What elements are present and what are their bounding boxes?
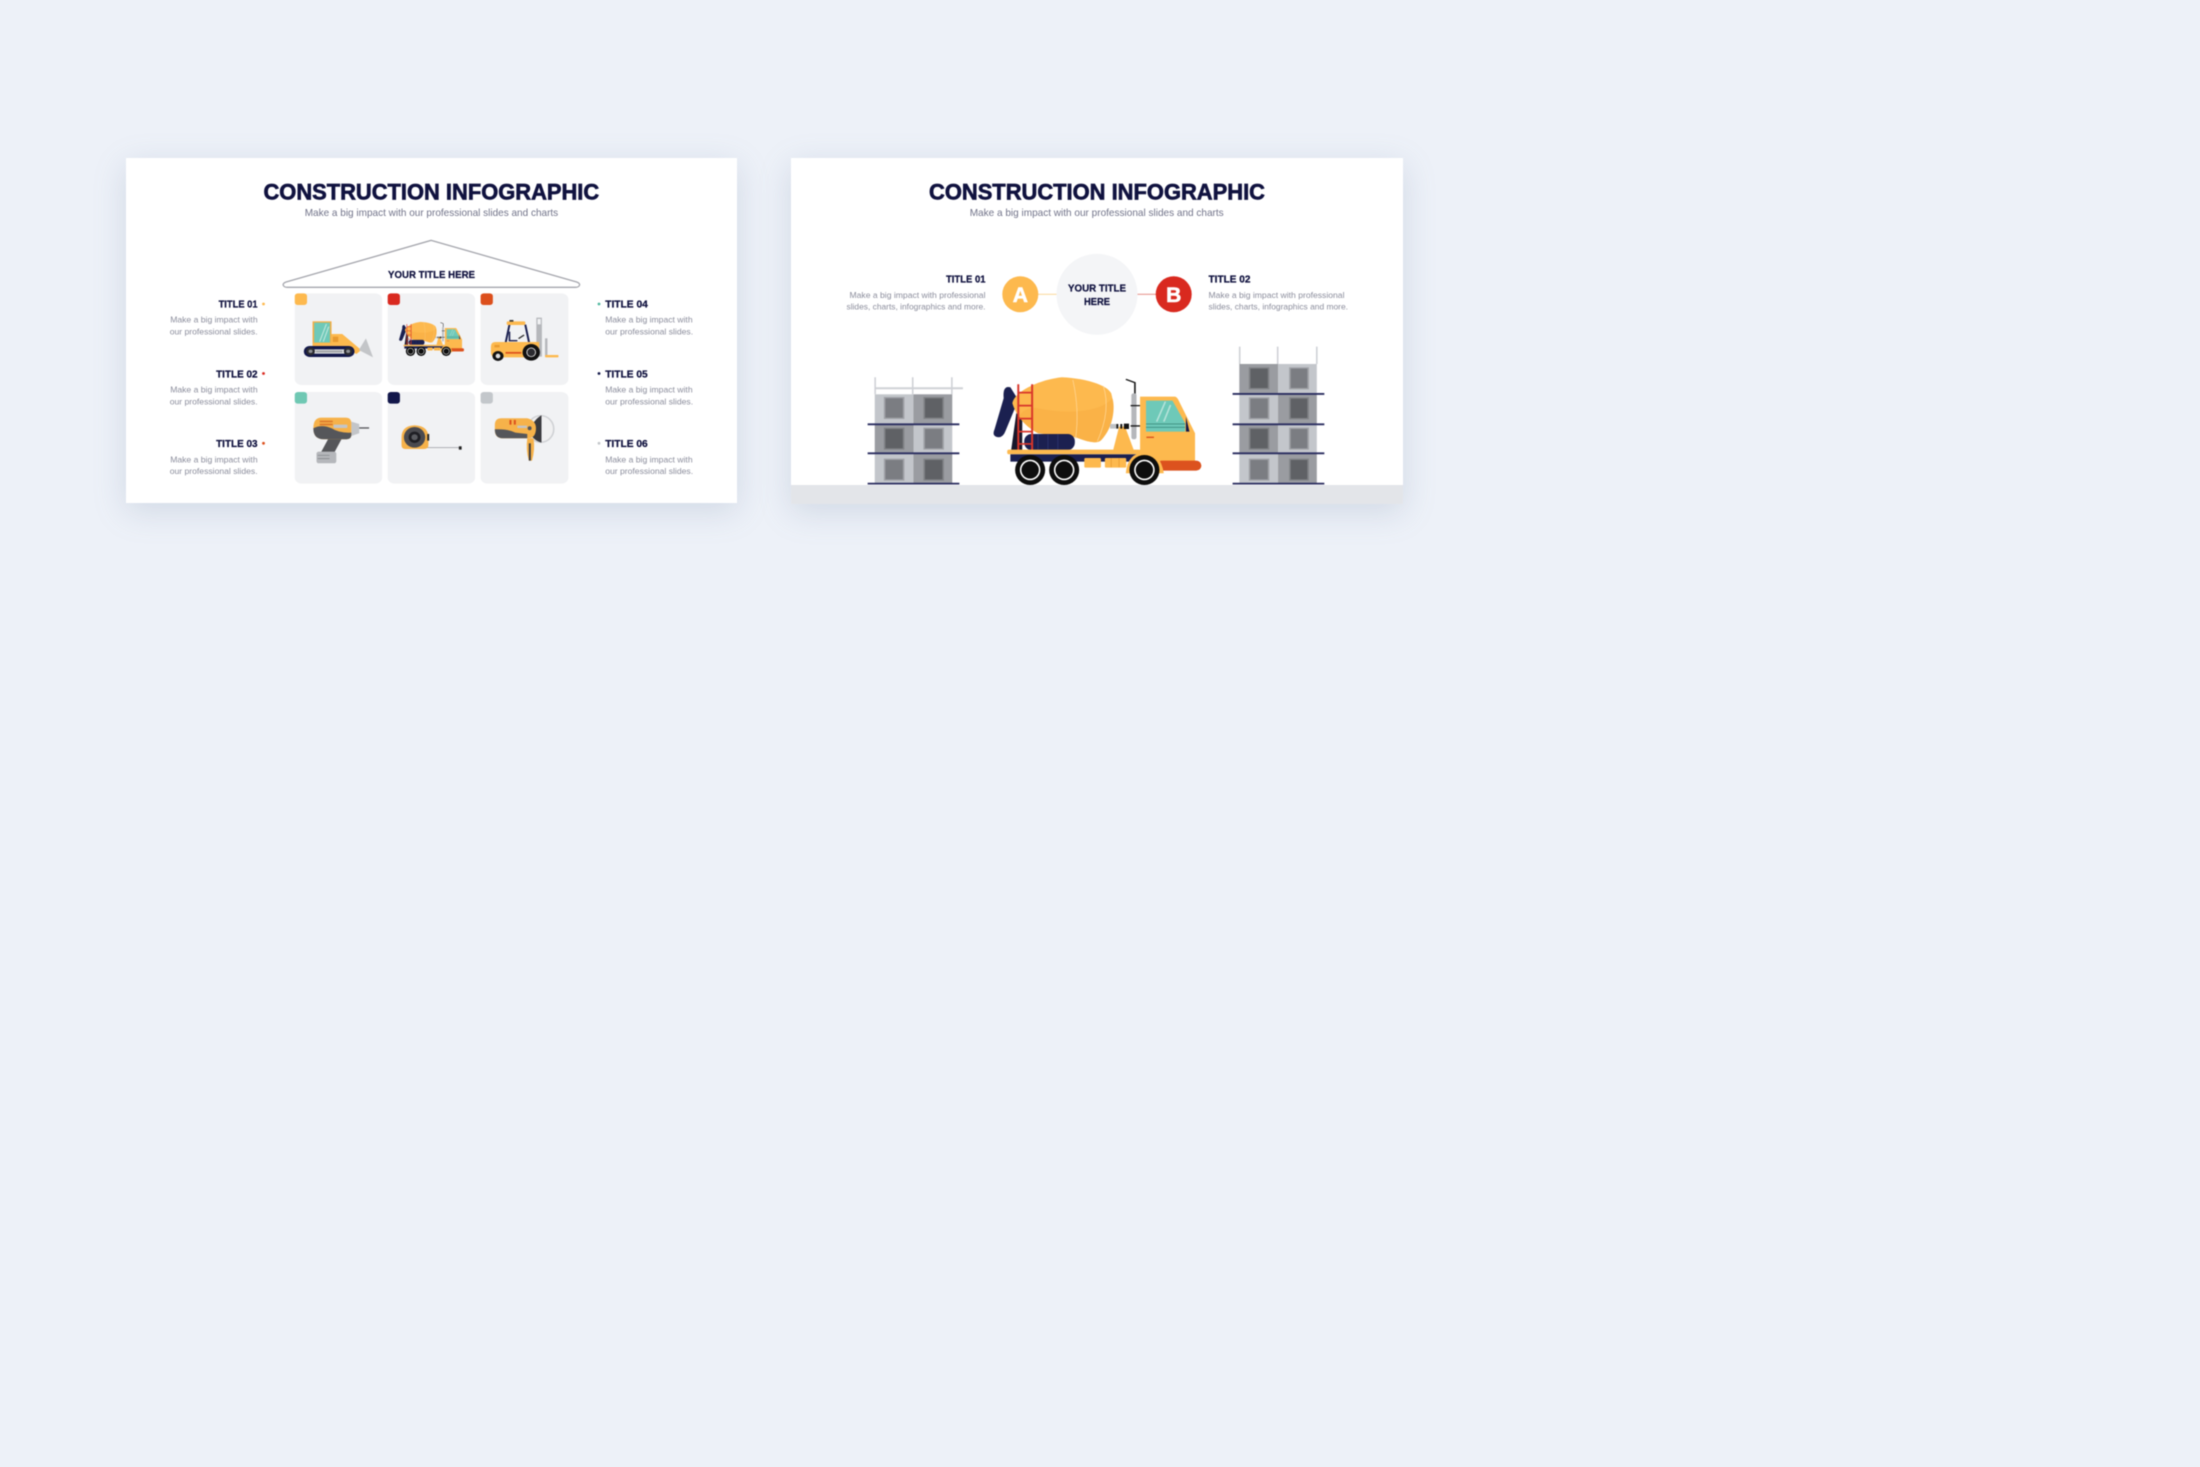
text block: title 02 <box>1208 274 1348 311</box>
badge B <box>1156 276 1192 312</box>
subtitle: Make a big impact with our professional slides and charts <box>970 207 1224 219</box>
panel: A and B comparison with mixer truck <box>791 158 1403 504</box>
left item: title 03: TITLE 03 <box>216 438 258 450</box>
subtitle: Make a big impact with our professional slides and charts <box>305 207 558 219</box>
panel: six construction tools and vehicles <box>126 158 737 503</box>
text block: title 02: slides, charts, infographics and more. <box>1208 301 1348 311</box>
title: CONSTRUCTION INFOGRAPHIC <box>929 179 1265 204</box>
central circle: YOUR TITLE <box>1068 283 1126 295</box>
icon: small mixer truck <box>399 322 464 356</box>
text block: title 01: Make a big impact with professional <box>850 290 986 300</box>
left building <box>868 377 963 484</box>
connector lines <box>1038 294 1156 295</box>
badge A <box>1002 276 1038 312</box>
card 6: angle grinder <box>481 392 568 484</box>
card 5: tape measure <box>388 392 475 484</box>
left item: title 01: our professional slides. <box>170 326 258 336</box>
right item: title 04: TITLE 04 <box>605 299 648 311</box>
left item: title 02: Make a big impact with <box>170 385 258 395</box>
right item: title 04: our professional slides. <box>605 326 693 336</box>
right item: title 05: Make a big impact with <box>605 385 693 395</box>
badge B: B <box>1166 284 1181 307</box>
left item: title 02 <box>170 368 265 406</box>
left item: title 03: Make a big impact with <box>170 454 258 464</box>
right item: title 06: Make a big impact with <box>605 454 693 464</box>
roof outline <box>283 240 580 287</box>
left item: title 02: our professional slides. <box>170 396 258 406</box>
ground band <box>791 485 1403 504</box>
right item: title 06: TITLE 06 <box>605 438 648 450</box>
card 3: forklift <box>481 293 568 385</box>
left item: title 01: TITLE 01 <box>219 299 258 311</box>
right building <box>1233 347 1324 484</box>
illustration: cement mixer truck <box>994 377 1201 485</box>
card 2: mixer truck <box>388 293 475 385</box>
text block: title 02: Make a big impact with professional <box>1208 290 1345 300</box>
left item: title 01 <box>170 299 265 336</box>
card grid with illustrations <box>295 293 568 484</box>
text block: title 01: TITLE 01 <box>946 274 986 286</box>
right item: title 04 <box>598 299 693 336</box>
left item: title 01: Make a big impact with <box>170 315 258 325</box>
right item: title 06: our professional slides. <box>605 466 693 476</box>
card 4: drill <box>295 392 382 484</box>
left item: title 03 <box>170 438 265 476</box>
right item: title 04: Make a big impact with <box>605 315 693 325</box>
card 1: bulldozer <box>295 293 382 385</box>
right item: title 06 <box>598 438 693 476</box>
text block: title 02: TITLE 02 <box>1208 274 1251 286</box>
roof heading: YOUR TITLE HERE <box>388 269 475 281</box>
text block: title 01 <box>846 274 986 311</box>
title: CONSTRUCTION INFOGRAPHIC <box>264 179 599 204</box>
badge A: A <box>1013 284 1028 307</box>
right item: title 05: our professional slides. <box>605 396 693 406</box>
central circle <box>1056 254 1138 335</box>
left item: title 02: TITLE 02 <box>216 368 258 380</box>
text block: title 01: slides, charts, infographics and more. <box>846 301 986 311</box>
right item: title 05: TITLE 05 <box>605 368 648 380</box>
left item: title 03: our professional slides. <box>170 466 258 476</box>
right item: title 05 <box>598 368 693 406</box>
central circle: HERE <box>1084 296 1110 308</box>
